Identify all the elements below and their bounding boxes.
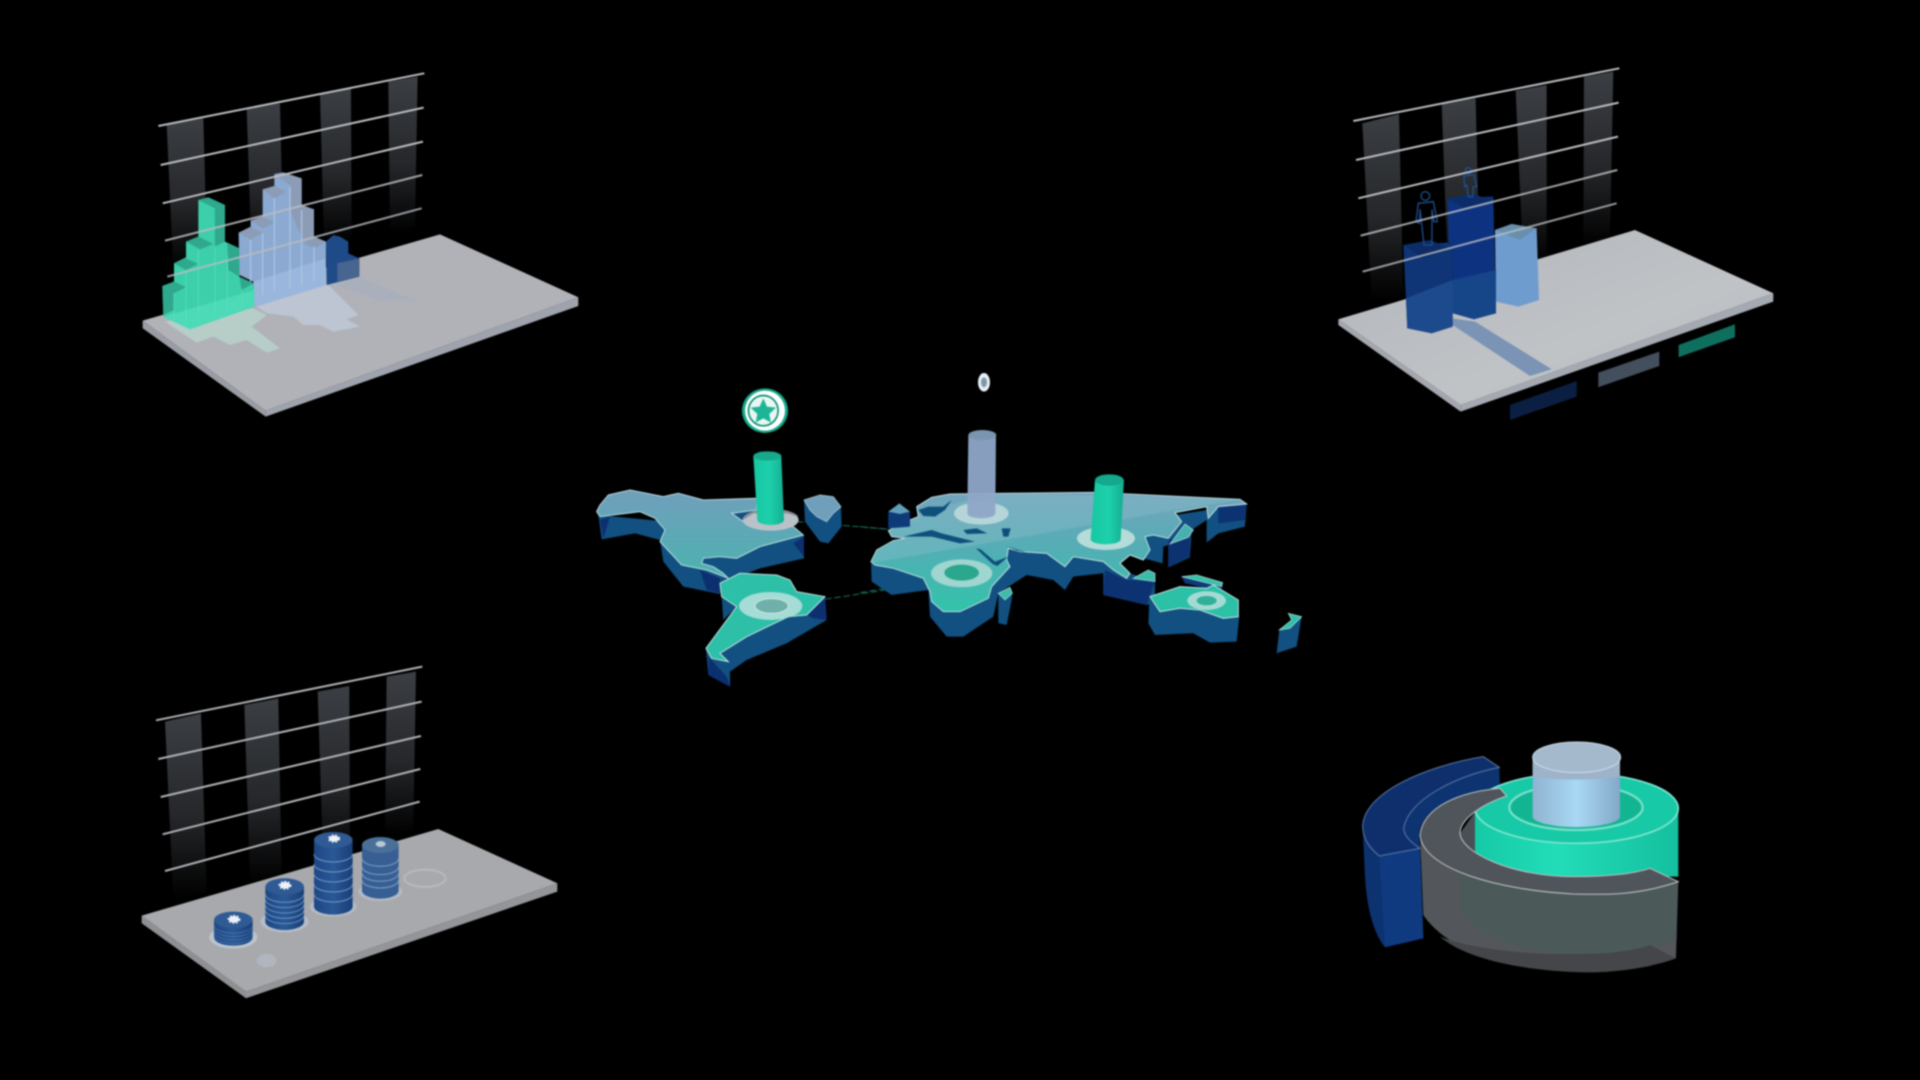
south america ring marker (739, 592, 802, 620)
panel: world map east (860, 373, 1302, 653)
ghost coin icon (257, 954, 277, 967)
panel: world map west (597, 388, 890, 687)
panel: concentric ring chart (1363, 742, 1678, 972)
uk island (888, 503, 910, 528)
coin stack 4 (358, 837, 402, 901)
dashed connector lines (797, 522, 890, 599)
panel: histogram chart on platform (143, 73, 578, 417)
greenland (804, 495, 842, 543)
floor band (1440, 317, 1552, 376)
small floating icon (978, 373, 990, 392)
madagascar (998, 587, 1012, 625)
back wall columns (165, 672, 416, 898)
short dark blue bar (1403, 240, 1453, 333)
new zealand (1277, 613, 1302, 653)
legend chips (1510, 324, 1735, 420)
grid lines (158, 73, 424, 277)
grid lines (1353, 68, 1619, 272)
back wall columns (167, 77, 418, 270)
grey ring segment (1420, 788, 1678, 972)
panel: coin stacks on platform (142, 667, 557, 998)
dark blue histogram (326, 235, 359, 285)
coin stack 1 (209, 912, 257, 949)
africa ring marker (931, 559, 992, 587)
eurasia and africa surface (871, 492, 1247, 612)
light blue hexagonal bar (1495, 224, 1539, 307)
infographic canvas (140, 66, 1774, 999)
australia (1148, 585, 1239, 643)
south america (706, 573, 827, 687)
eurasia and africa extrusion (871, 504, 1247, 637)
light blue cylinder (1533, 742, 1621, 827)
dark blue ring segment (1363, 757, 1500, 947)
platform (143, 234, 578, 417)
green histogram (162, 197, 254, 329)
north america (597, 490, 804, 594)
north america pin column (743, 451, 799, 531)
south east asia island (1133, 570, 1155, 582)
dashed connector lines (860, 527, 927, 593)
platform (142, 829, 557, 998)
person icon left (1416, 192, 1437, 245)
grey inner wall (1460, 805, 1480, 913)
coin stack 2 (261, 878, 309, 932)
inland seas (903, 500, 1027, 566)
asia ring and pin column (1077, 474, 1135, 550)
grid lines (156, 667, 422, 871)
platform (1338, 230, 1773, 412)
japan (1170, 524, 1193, 544)
icon: star badge (742, 388, 788, 433)
person icon right (1464, 168, 1477, 197)
panel: people height chart on platform (1338, 68, 1773, 420)
green ring (1475, 773, 1678, 877)
light diagonal sheen (870, 493, 1247, 563)
floor reflections of the bars (165, 277, 423, 353)
europe ring and pin column (954, 430, 1009, 525)
empty ring marker (404, 870, 446, 887)
tall dark blue bar (1448, 194, 1496, 319)
coin stack 3 (310, 832, 357, 917)
back wall columns (1362, 72, 1613, 300)
light blue histogram (239, 172, 326, 307)
new guinea (1182, 575, 1223, 592)
